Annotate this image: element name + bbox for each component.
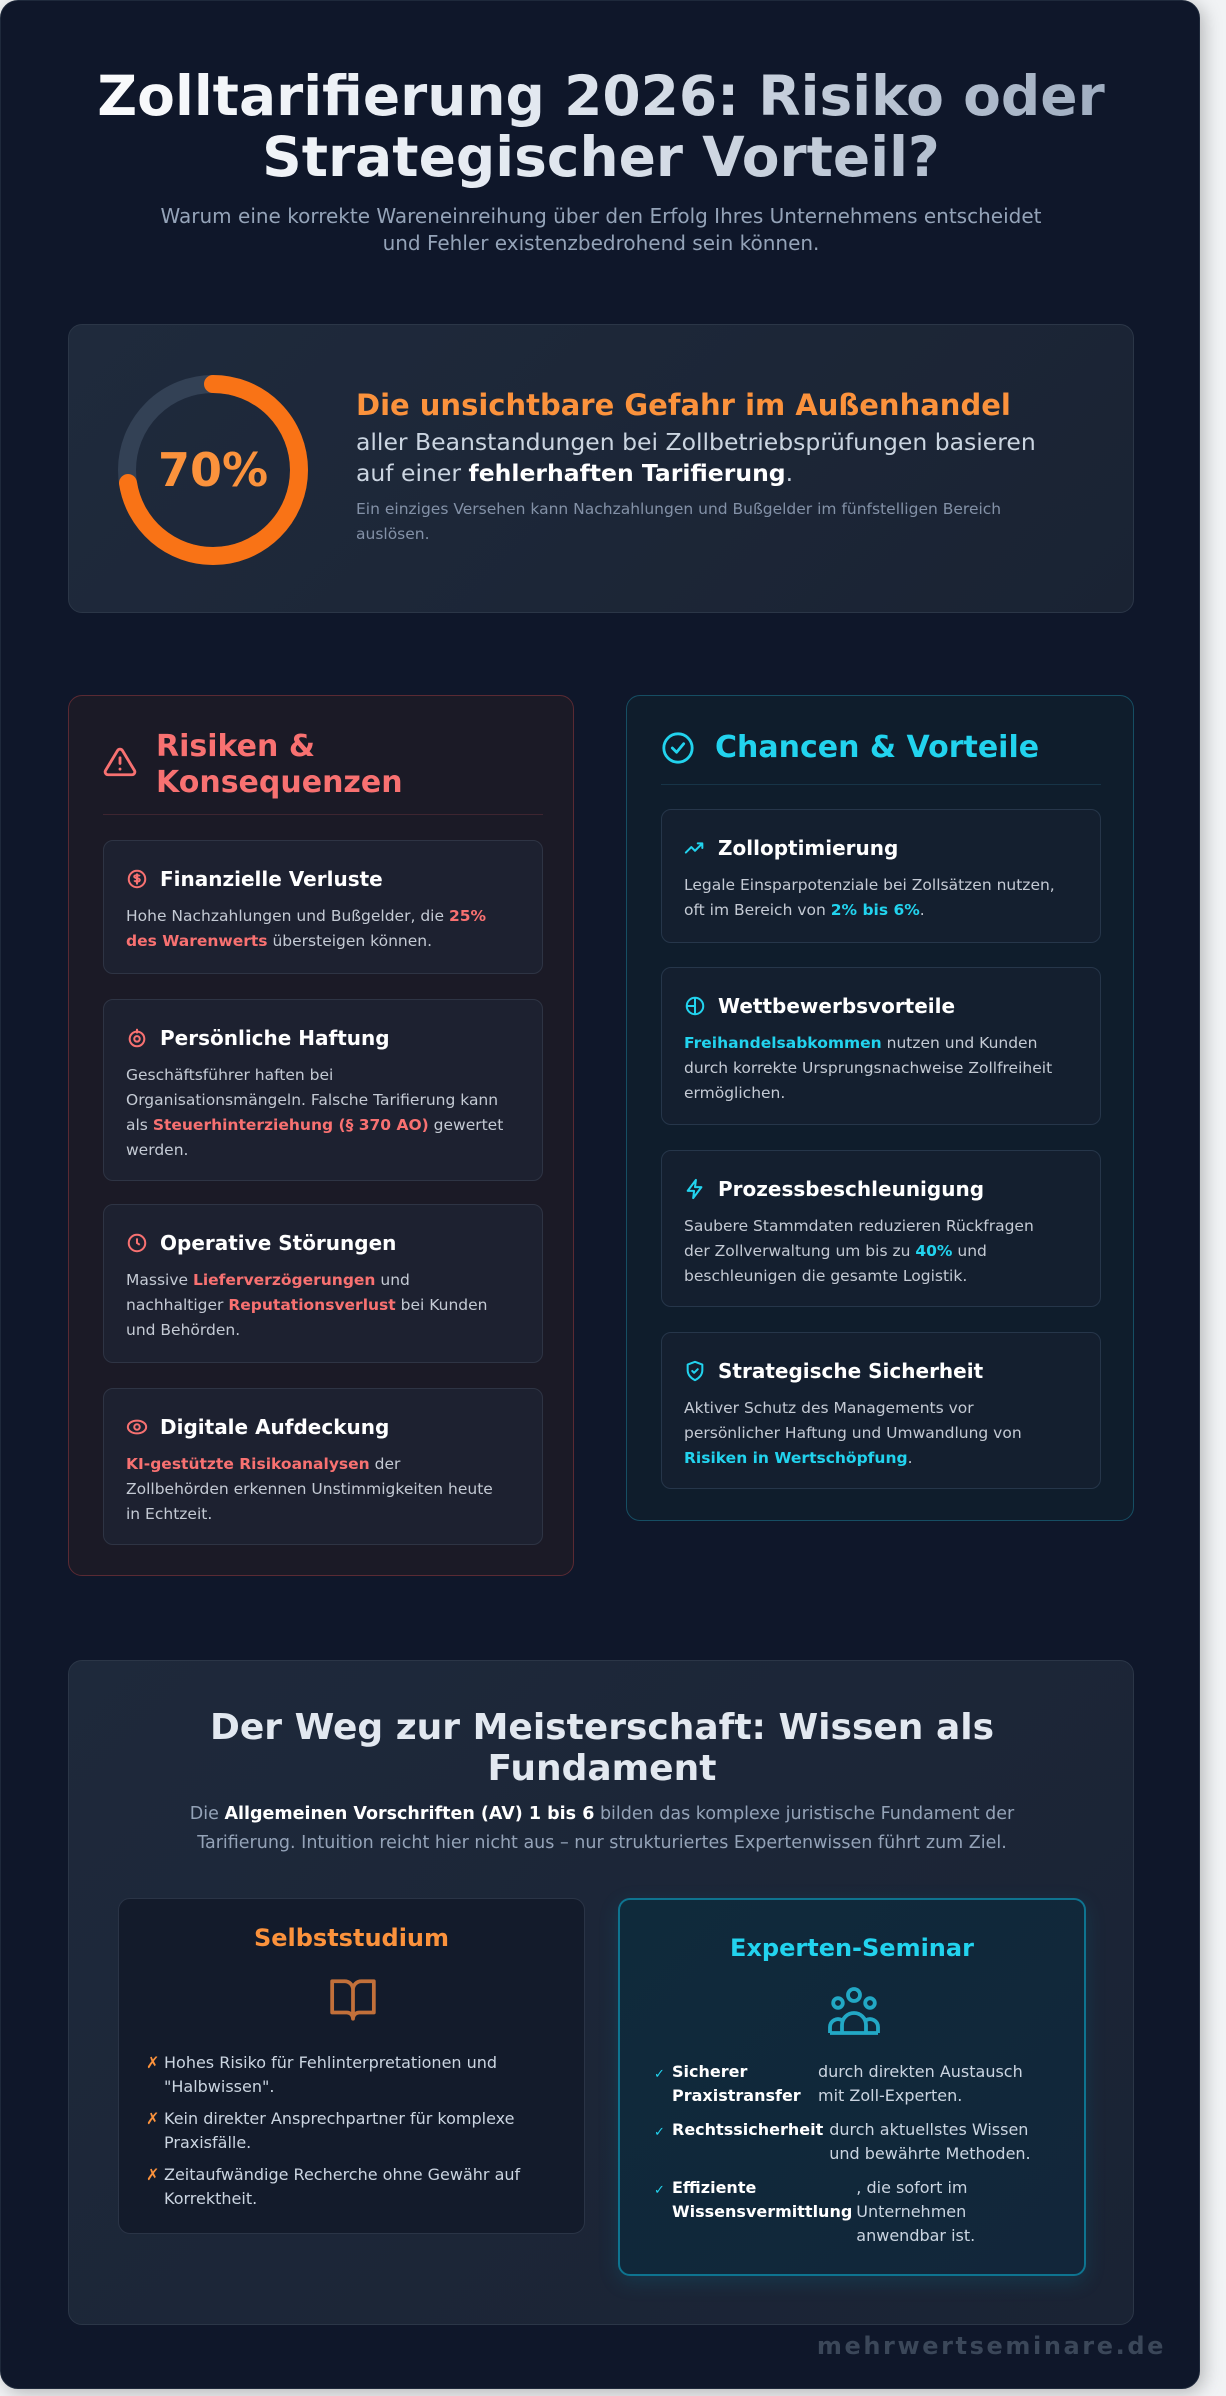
chart: donut 70%: 70% [158,443,268,497]
card: Zolloptimierung: oft im Bereich von 2% bis 6%. [684,901,925,919]
card: Persönliche Haftung: Persönliche Haftung [160,1026,390,1050]
card: Wettbewerbsvorteile [661,967,1101,1125]
card: Strategische Sicherheit: Strategische Sicherheit [718,1359,983,1383]
stat text: Die unsichtbare Gefahr im Außenhandel [356,388,1011,422]
list: cons: Hohes Risiko für Fehlinterpretationen und [164,2053,497,2072]
list: pros [654,2062,1031,2245]
panel: risks [68,695,574,1576]
card: Operative Störungen: nachhaltiger Reputationsverlust bei Kunden [126,1296,487,1314]
card: Strategische Sicherheit: persönlicher Haftung und Umwandlung von [684,1424,1022,1442]
list: cons: Praxisfälle. [164,2133,251,2152]
panel: opportunities [626,695,1134,1521]
heading: risks [103,729,543,815]
stat text: auslösen. [356,525,430,543]
list: pros: ✓ [654,2125,665,2140]
card: Digitale Aufdeckung: Zollbehörden erkennen Unstimmigkeiten heute [126,1480,493,1498]
card: Prozessbeschleunigung: der Zollverwaltung um bis zu 40% und [684,1242,987,1260]
intro text: Die Allgemeinen Vorschriften (AV) 1 bis 6 bilden das komplexe juristische Fundament der [190,1804,1014,1824]
heading: knowledge: Fundament [488,1748,716,1789]
stat text [356,388,1036,543]
list: pros: anwendbar ist. [856,2226,975,2245]
card: Finanzielle Verluste: des Warenwerts übersteigen können. [126,932,432,950]
subtitle [161,204,1041,255]
card: Wettbewerbsvorteile: durch korrekte Ursprungsnachweise Zollfreiheit [684,1059,1052,1077]
card: Prozessbeschleunigung: Saubere Stammdaten reduzieren Rückfragen [684,1217,1034,1235]
intro text: Tarifierung. Intuition reicht hier nicht aus – nur strukturiertes Expertenwissen führt zum Ziel. [197,1833,1007,1853]
card: Prozessbeschleunigung [661,1150,1101,1307]
card: Persönliche Haftung: Organisationsmängeln. Falsche Tarifierung kann [126,1091,498,1109]
list: cons: Kein direkter Ansprechpartner für komplexe [164,2109,514,2128]
list: cons: ✗ [146,2165,159,2184]
card: Persönliche Haftung: Geschäftsführer haften bei [126,1066,333,1084]
card: Finanzielle Verluste [103,840,543,974]
list: pros: durch aktuellstes Wissen [829,2120,1028,2139]
card: Persönliche Haftung [103,999,543,1181]
card: Experten-Seminar [618,1898,1086,2276]
card: Digitale Aufdeckung [103,1388,543,1545]
subtitle: Warum eine korrekte Wareneinreihung über den Erfolg Ihres Unternehmens entscheidet [161,204,1041,228]
card: Operative Störungen: Massive Lieferverzögerungen und [126,1271,410,1289]
card: Wettbewerbsvorteile: Wettbewerbsvorteile [718,994,955,1018]
card: Digitale Aufdeckung: KI-gestützte Risikoanalysen der [126,1455,400,1473]
list: pros: durch direkten Austausch [818,2062,1023,2081]
panel: knowledge [68,1660,1134,2325]
card: Prozessbeschleunigung: beschleunigen die gesamte Logistik. [684,1267,967,1285]
list: cons [146,2053,520,2208]
card: Selbststudium: Selbststudium [254,1924,449,1952]
card: Finanzielle Verluste: Hohe Nachzahlungen und Bußgelder, die 25% [126,907,486,925]
stat text: aller Beanstandungen bei Zollbetriebsprüfungen basieren [356,428,1036,456]
card: Strategische Sicherheit: Aktiver Schutz des Managements vor [684,1399,974,1417]
icon: users [828,1987,880,2035]
card: Wettbewerbsvorteile: ermöglichen. [684,1084,785,1102]
card: Experten-Seminar: Experten-Seminar [730,1934,974,1962]
list: pros: , die sofort im [856,2178,968,2197]
card: Strategische Sicherheit: Risiken in Wertschöpfung. [684,1449,913,1467]
card: Zolloptimierung [661,809,1101,943]
card: Operative Störungen [103,1204,543,1363]
card: Strategische Sicherheit [661,1332,1101,1489]
list: cons: Zeitaufwändige Recherche ohne Gewähr auf [164,2165,520,2184]
list: pros: Unternehmen [856,2202,966,2221]
list: pros: ✓ [654,2183,665,2198]
card: Operative Störungen: Operative Störungen [160,1231,396,1255]
card: Persönliche Haftung: als Steuerhinterziehung (§ 370 AO) gewertet [126,1116,503,1134]
card: Wettbewerbsvorteile: Freihandelsabkommen nutzen und Kunden [684,1034,1037,1052]
heading: opportunities: Chancen & Vorteile [715,730,1039,765]
card: Prozessbeschleunigung: Prozessbeschleunigung [718,1177,984,1201]
heading: risks: Risiken & [156,729,315,764]
title: Strategischer Vorteil? [262,125,940,189]
heading: opportunities [661,729,1101,785]
list: pros: ✓ [654,2067,665,2082]
list: pros: Effiziente [672,2178,756,2197]
stat text: Ein einziges Versehen kann Nachzahlungen und Bußgelder im fünfstelligen Bereich [356,500,1001,518]
list: cons: "Halbwissen". [164,2077,274,2096]
list: pros: und bewährte Methoden. [829,2144,1031,2163]
icon: warning [104,748,136,776]
list: cons: Korrektheit. [164,2189,257,2208]
list: cons: ✗ [146,2109,159,2128]
intro text [190,1804,1014,1853]
card: Operative Störungen: und Behörden. [126,1321,240,1339]
footer: brand: mehrwertseminare.de [817,2332,1166,2360]
heading: knowledge [210,1707,994,1789]
panel: stat [68,324,1134,613]
card: Zolloptimierung: Zolloptimierung [718,836,898,860]
stat text: auf einer fehlerhaften Tarifierung. [356,459,793,487]
list: pros: Sicherer Praxistransfer [672,2062,801,2105]
card: Digitale Aufdeckung: Digitale Aufdeckung [160,1415,389,1439]
list: pros: Rechtssicherheit [672,2120,823,2139]
title [1,66,1201,188]
list: pros: mit Zoll-Experten. [818,2086,962,2105]
title: Zolltarifierung 2026: Risiko oder [97,64,1105,128]
heading: risks: Konsequenzen [156,765,403,800]
card: Persönliche Haftung: werden. [126,1141,188,1159]
card: Digitale Aufdeckung: in Echtzeit. [126,1505,212,1523]
list: cons: ✗ [146,2053,159,2072]
subtitle: und Fehler existenzbedrohend sein können. [383,231,819,255]
chart: donut 70% [118,375,308,565]
list: pros: Wissensvermittlung [672,2202,852,2221]
icon: check circle [662,732,694,764]
icon: book [330,1979,376,2021]
card: Selbststudium [118,1898,585,2234]
heading: knowledge: Der Weg zur Meisterschaft: Wissen als [210,1707,994,1748]
card: Finanzielle Verluste: Finanzielle Verluste [160,867,383,891]
card: Zolloptimierung: Legale Einsparpotenziale bei Zollsätzen nutzen, [684,876,1055,894]
